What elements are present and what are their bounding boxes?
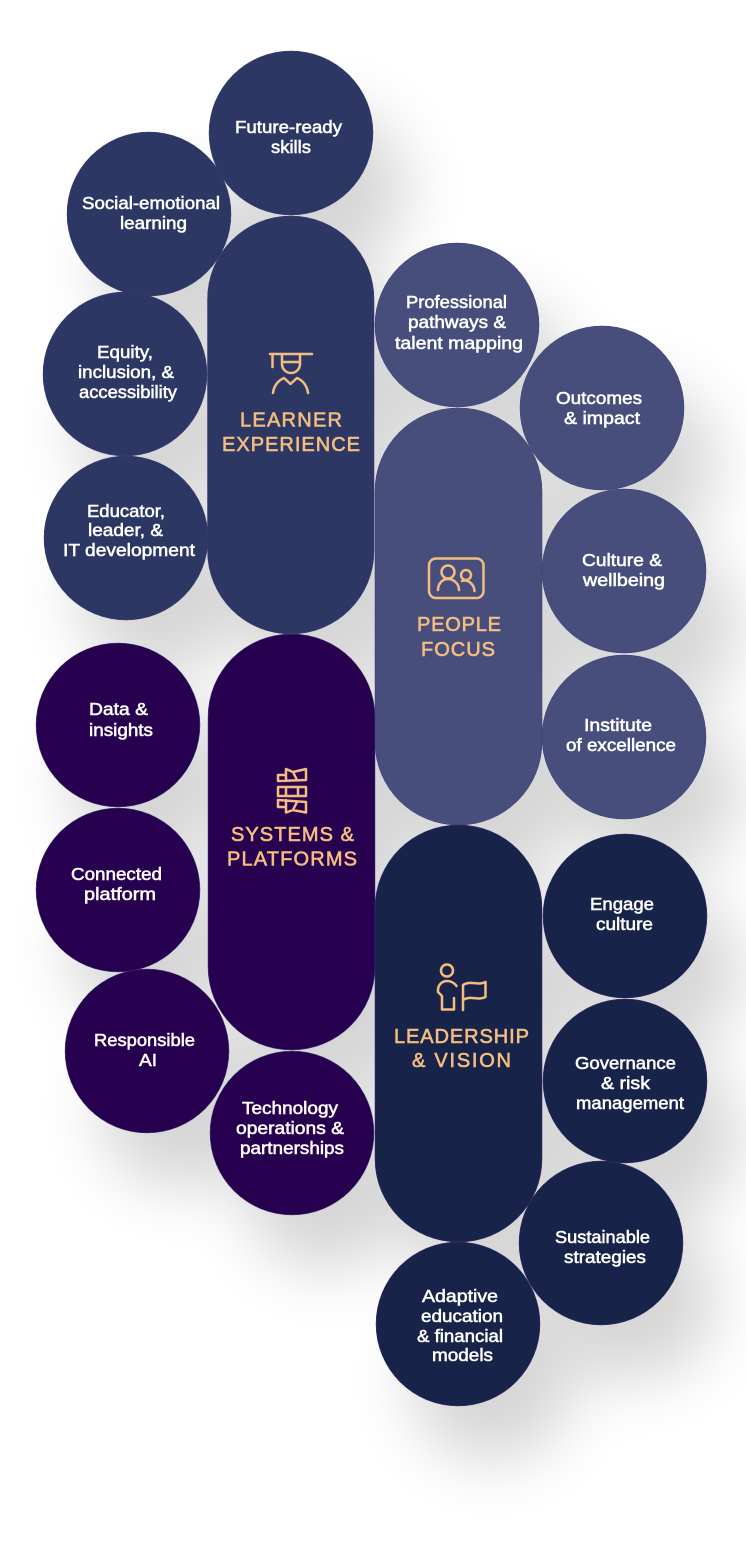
labels: leadership circles: Governance (575, 1053, 676, 1073)
labels: systems circles: AI (139, 1050, 157, 1070)
labels: systems circles: platform (84, 884, 156, 904)
circle: institute of excellence (542, 655, 706, 819)
panel: leadership and vision (375, 825, 707, 1406)
labels: leadership circles: & financial (417, 1326, 503, 1346)
labels: people circles: Professional (406, 292, 507, 312)
labels: leadership circles: Engage (590, 894, 654, 914)
heading: people focus: PEOPLE (417, 614, 501, 636)
labels: leadership circles: culture (596, 914, 653, 934)
labels: learner circles: accessibility (79, 382, 177, 402)
circle: outcomes and impact (520, 326, 684, 490)
circle: engage culture (543, 834, 707, 998)
heading: learner experience: EXPERIENCE (222, 434, 360, 456)
labels: systems circles: Technology (242, 1098, 338, 1118)
labels: leadership circles (417, 894, 684, 1365)
labels: learner circles: IT development (63, 540, 195, 560)
labels: systems circles (71, 699, 344, 1158)
heading: learner experience (222, 410, 360, 456)
labels: leadership circles: strategies (564, 1247, 646, 1267)
labels: systems circles: Responsible (94, 1030, 195, 1050)
labels: learner circles (63, 117, 342, 560)
labels: leadership circles: & risk (601, 1073, 650, 1093)
labels: systems circles: partnerships (240, 1138, 344, 1158)
labels: people circles: talent mapping (395, 333, 523, 353)
circle: sustainable strategies (519, 1161, 683, 1325)
labels: systems circles: Connected (71, 864, 162, 884)
labels: learner circles: inclusion, & (78, 362, 174, 382)
heading: leadership and vision: LEADERSHIP (394, 1026, 529, 1048)
labels: leadership circles: education (421, 1306, 503, 1326)
heading: people focus (417, 614, 501, 661)
labels: people circles: Outcomes (556, 388, 642, 408)
labels: people circles: & impact (564, 408, 640, 428)
circle: equity, inclusion and accessibility (43, 292, 207, 456)
circle: adaptive education and financial models (376, 1242, 540, 1406)
panel: learner experience (43, 51, 374, 634)
labels: learner circles: Future-ready (235, 117, 342, 137)
panel: systems and platforms (36, 634, 375, 1215)
pill: systems and platforms (208, 634, 375, 1050)
circle: connected platform (36, 808, 200, 972)
circle: culture and wellbeing (542, 489, 706, 653)
circle: educator, leader and IT development (44, 456, 208, 620)
heading: systems and platforms: SYSTEMS & (231, 824, 355, 846)
heading: learner experience: LEARNER (240, 410, 342, 432)
labels: learner circles: Educator, (87, 501, 165, 521)
labels: systems circles: operations & (236, 1118, 344, 1138)
pill: learner experience (208, 216, 374, 634)
drop shadow (70, 107, 741, 1462)
labels: leadership circles: models (432, 1345, 493, 1365)
labels: people circles: of excellence (566, 735, 676, 755)
labels: systems circles: insights (89, 720, 153, 740)
labels: learner circles: Social-emotional (82, 193, 220, 213)
pill: leadership and vision (375, 825, 542, 1242)
panel: people focus (375, 243, 706, 825)
labels: learner circles: leader, & (88, 520, 163, 540)
labels: people circles (395, 292, 676, 755)
circle: future-ready skills (209, 51, 373, 215)
heading: systems and platforms (227, 824, 357, 870)
labels: people circles: Culture & (582, 550, 662, 570)
icon: person with flag (438, 964, 486, 1010)
labels: leadership circles: management (576, 1093, 684, 1113)
heading: systems and platforms: PLATFORMS (227, 848, 357, 870)
labels: leadership circles: Sustainable (555, 1227, 650, 1247)
labels: people circles: Institute (584, 715, 652, 735)
labels: systems circles: Data & (89, 699, 148, 719)
circle: data and insights (36, 643, 200, 807)
heading: people focus: FOCUS (421, 639, 495, 661)
heading: leadership and vision (394, 1026, 529, 1072)
circle: professional pathways (375, 243, 539, 407)
labels: learner circles: Equity, (97, 342, 153, 362)
labels: people circles: wellbeing (582, 570, 665, 590)
icon: people in frame (429, 558, 484, 598)
icon: stacked blocks (278, 769, 306, 812)
labels: leadership circles: Adaptive (422, 1286, 498, 1306)
circle: responsible AI (65, 969, 229, 1133)
heading: leadership and vision: & VISION (412, 1050, 511, 1072)
icon: graduate (270, 354, 312, 393)
pill: people focus (375, 408, 542, 825)
labels: learner circles: learning (120, 213, 187, 233)
circle: governance and risk management (543, 999, 707, 1163)
circle: social-emotional learning (67, 132, 231, 296)
circle: technology operations (210, 1051, 374, 1215)
labels: learner circles: skills (271, 137, 311, 157)
labels: people circles: pathways & (408, 312, 506, 332)
